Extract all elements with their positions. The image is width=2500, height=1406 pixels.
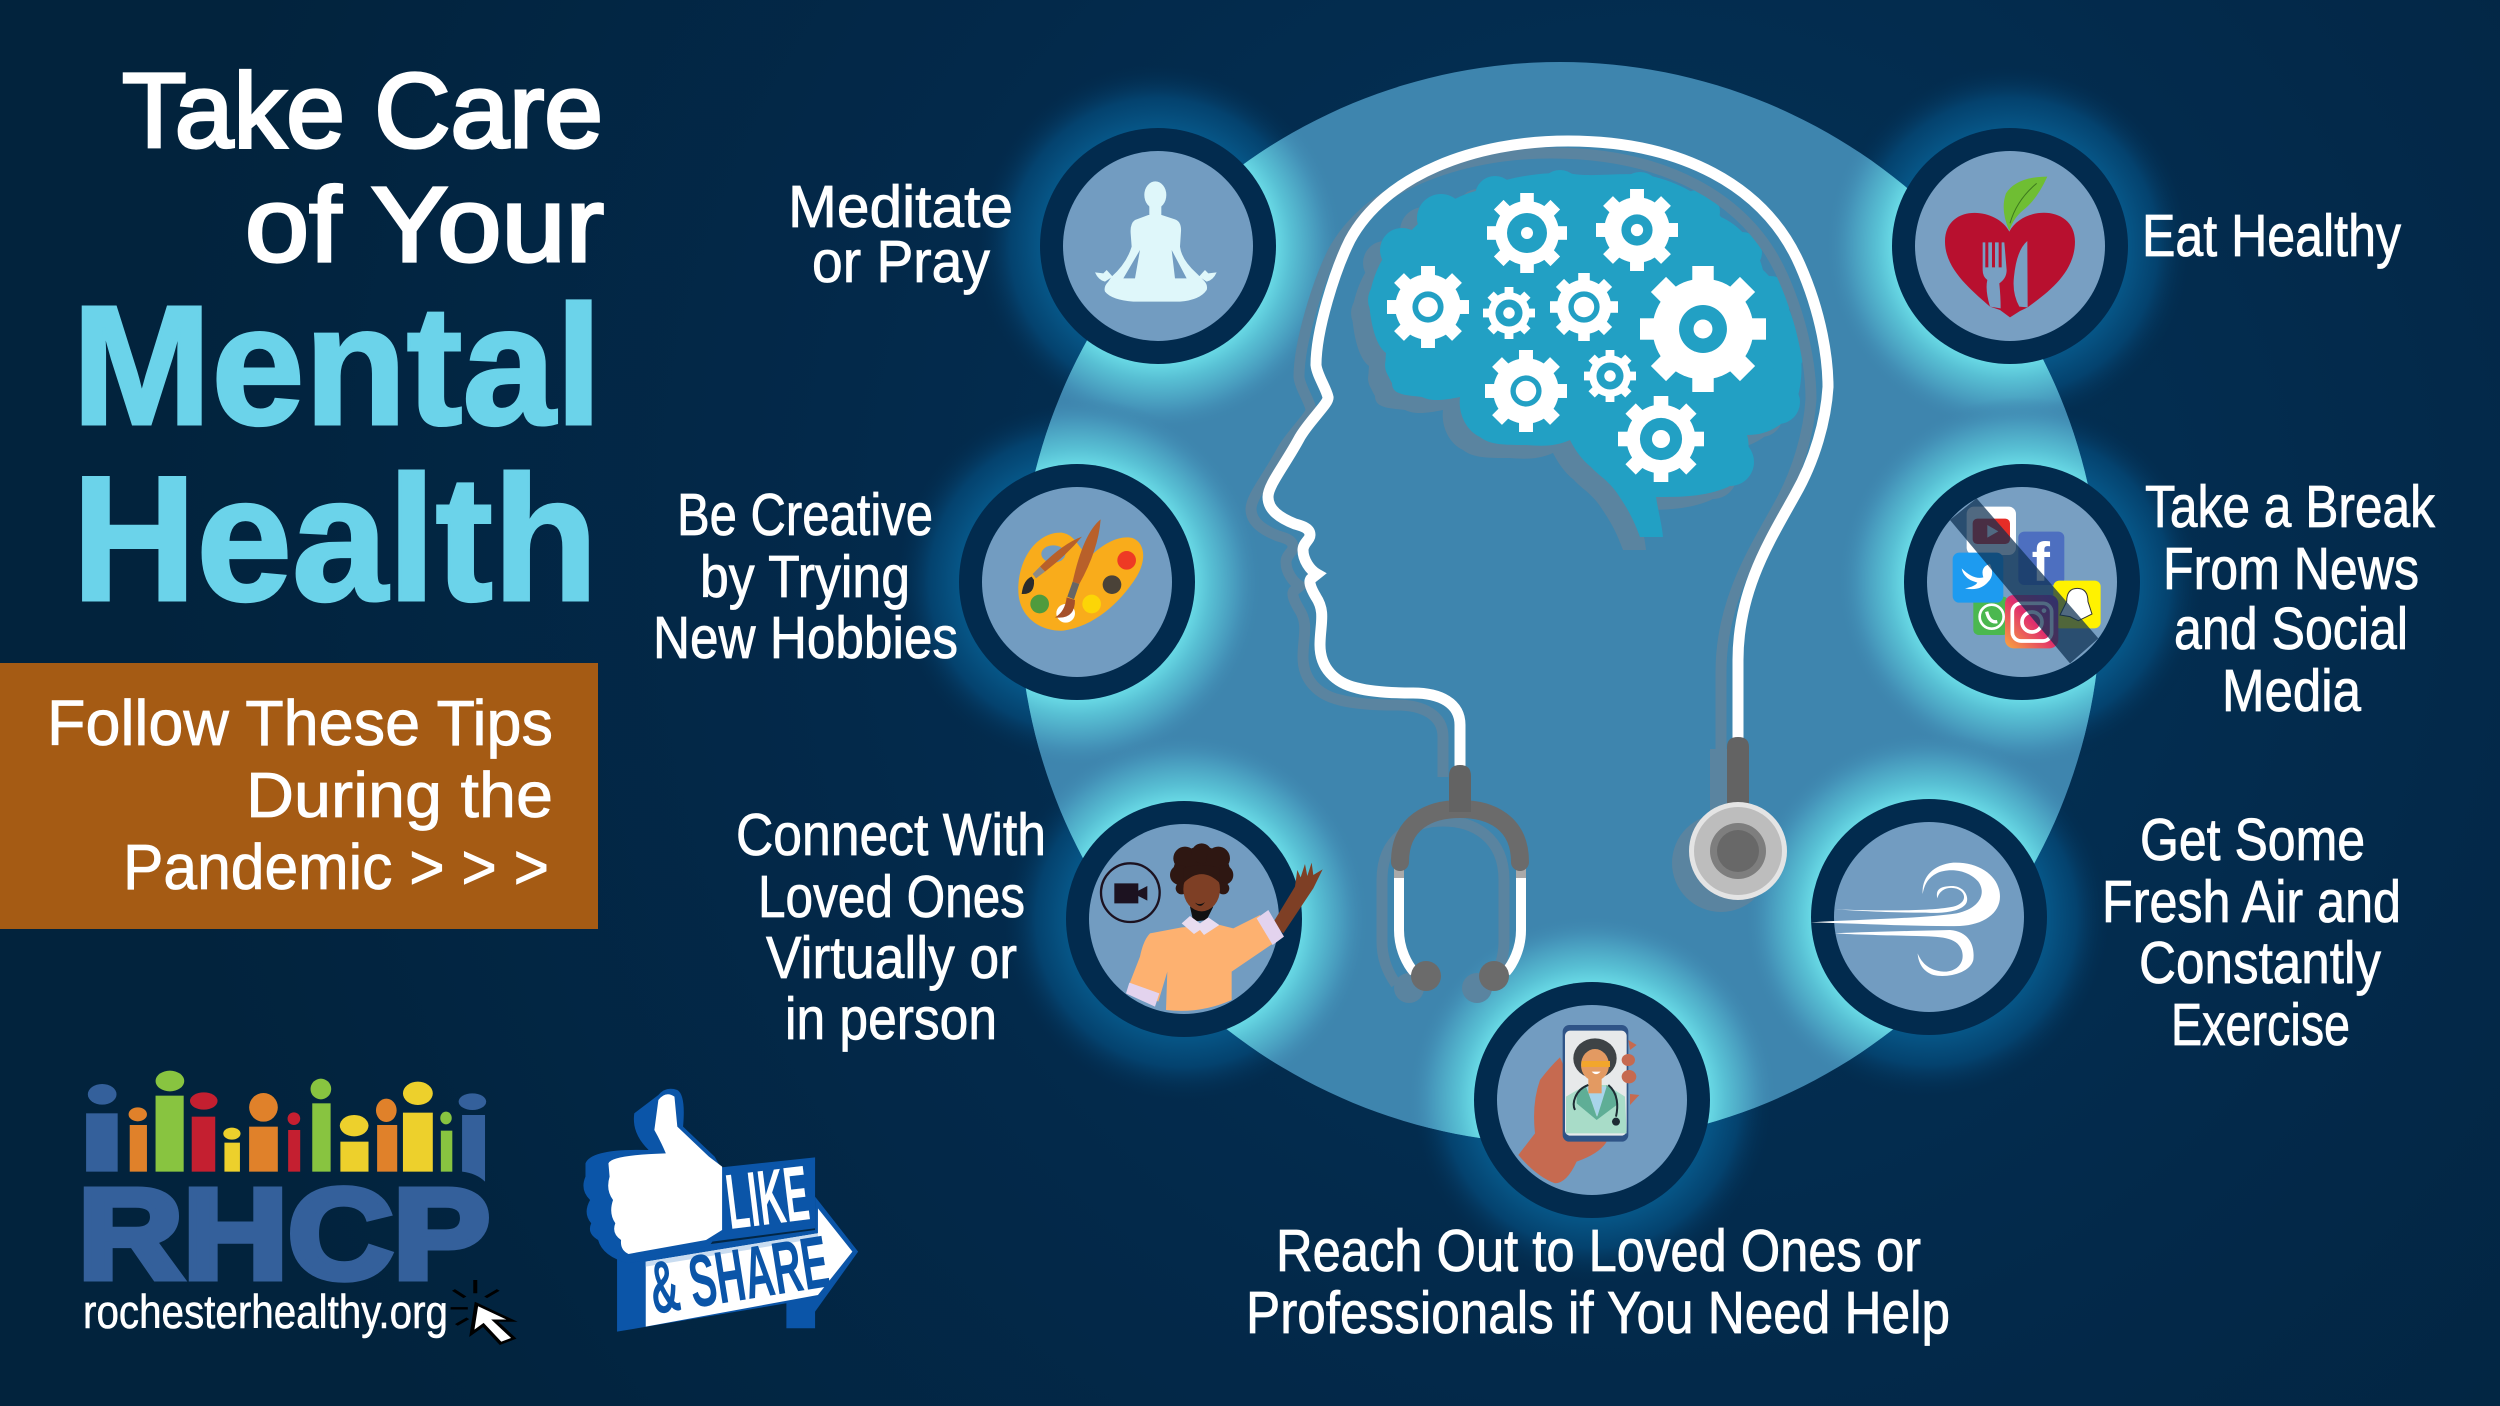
panel: follow these tips banner: Pandemic > > > [123, 831, 549, 903]
icon: meditating figure [1095, 181, 1217, 302]
icon ring [1904, 464, 2140, 700]
stethoscope ear piece [1394, 765, 1526, 991]
title: of Your [245, 166, 604, 284]
icon ring [1040, 128, 1276, 364]
label: connect with loved ones [736, 802, 1046, 1052]
large central circle [1019, 62, 2101, 1144]
label: be creative: Be Creative [677, 482, 933, 548]
panel: follow these tips banner: Follow These Tips [47, 687, 553, 759]
gear 7 [1485, 350, 1567, 432]
icon disc [1927, 487, 2117, 677]
icon ring [1811, 799, 2047, 1035]
facebook: f [2032, 531, 2051, 593]
gear 9 [1618, 396, 1704, 482]
gear 5 [1550, 273, 1618, 341]
tip: fresh air and exercise [1811, 799, 2047, 1035]
like and share badge: LIKE [721, 1149, 813, 1246]
icon disc [1915, 151, 2105, 341]
head outline [1268, 141, 1828, 765]
label: fresh air: Constantly [2139, 930, 2381, 996]
youtube [1967, 507, 2016, 555]
label: fresh air: Exercise [2171, 992, 2350, 1058]
icon: apple heart with fork and knife [1945, 177, 2075, 317]
brain shape [1368, 170, 1805, 537]
label: connect with loved ones: Connect With [736, 802, 1046, 868]
gear 4 small [1483, 287, 1535, 339]
gear 3 [1387, 266, 1469, 348]
whatsapp [1973, 597, 2008, 635]
like box [712, 1157, 815, 1242]
brain with gears [1351, 170, 1805, 550]
icon ring [1474, 982, 1710, 1218]
label: reach out [1246, 1218, 1950, 1346]
icon disc [982, 487, 1172, 677]
panel: follow these tips banner [0, 663, 598, 929]
gear 8 small [1584, 350, 1636, 402]
thumb outline [583, 1089, 720, 1263]
thumb [608, 1094, 722, 1254]
label: be creative: by Trying [700, 544, 910, 610]
icon: person waving on video call [1101, 843, 1323, 1011]
icon: cursor click [451, 1280, 514, 1343]
logo people bars [86, 1071, 486, 1182]
icon disc [1497, 1005, 1687, 1195]
title: Mental [72, 271, 602, 461]
arrow [617, 1197, 858, 1332]
label: be creative [653, 482, 958, 671]
label: be creative: New Hobbies [653, 605, 958, 671]
label: fresh air: Get Some [2140, 807, 2365, 873]
label: take a break: and Social [2174, 596, 2408, 662]
label: fresh air [2102, 807, 2401, 1058]
title [72, 52, 604, 638]
icon: hand holding phone with doctor [1518, 1025, 1639, 1183]
share text: & SHARE [644, 1220, 834, 1330]
tip: reach out for help [1474, 982, 1710, 1218]
icon: social media apps crossed out [1950, 498, 2101, 663]
label: take a break: Take a Break [2145, 474, 2435, 540]
tip: break from news and social media [1904, 464, 2140, 700]
title: Health [72, 439, 598, 638]
gear 1 [1487, 193, 1567, 273]
label: fresh air: Fresh Air and [2102, 869, 2401, 935]
label: reach out: Professionals if You Need Help [1246, 1280, 1950, 1346]
label: reach out: Reach Out to Loved Ones or [1276, 1218, 1921, 1284]
inner cyan glows [1026, 132, 2096, 1138]
label: take a break: Media [2222, 658, 2361, 724]
head and stethoscope [1251, 141, 1828, 1003]
icon: wind gusts [1811, 863, 2000, 976]
website url: rochesterhealthy.org [83, 1285, 448, 1338]
label: meditate or pray: or Pray [812, 229, 990, 295]
icon disc [1834, 822, 2024, 1012]
gear 6 large [1640, 266, 1766, 392]
label: connect with loved ones: Virtually or [766, 925, 1017, 991]
outer glows around the tip circles [892, 61, 2207, 1285]
label: meditate or pray [788, 174, 1013, 295]
logo: RHCP [78, 1071, 514, 1343]
icon: paint palette and brushes [1018, 519, 1143, 631]
snapchat [2053, 581, 2101, 628]
twitter [1953, 553, 2003, 603]
label: connect with loved ones: Loved Ones [758, 864, 1025, 930]
brain shadow [1351, 183, 1788, 550]
tip: eat healthy [1892, 128, 2128, 364]
label: take a break [2145, 474, 2435, 724]
label: eat healthy: Eat Healthy [2142, 203, 2401, 269]
tip: connect with loved ones [1066, 801, 1323, 1037]
head outline shadow [1251, 153, 1811, 1003]
instagram [2005, 595, 2058, 648]
stethoscope chest piece [1689, 737, 1787, 900]
label: connect with loved ones: in person [785, 986, 997, 1052]
tip: meditate or pray [1040, 128, 1276, 364]
tip: be creative [959, 464, 1195, 700]
icon ring [1892, 128, 2128, 364]
icon ring [959, 464, 1195, 700]
icon ring [1066, 801, 1302, 1037]
label: take a break: From News [2163, 536, 2419, 602]
label: meditate or pray: Meditate [788, 174, 1013, 240]
logo wordmark: RHCP [78, 1163, 490, 1306]
facebook [2018, 531, 2064, 593]
crossing band [1950, 498, 2098, 663]
icon disc [1089, 824, 1279, 1014]
title: Take Care [122, 52, 603, 170]
like and share badge [583, 1089, 858, 1332]
icon disc [1063, 151, 1253, 341]
gear 2 [1596, 189, 1678, 271]
panel: follow these tips banner: During the [246, 759, 553, 831]
